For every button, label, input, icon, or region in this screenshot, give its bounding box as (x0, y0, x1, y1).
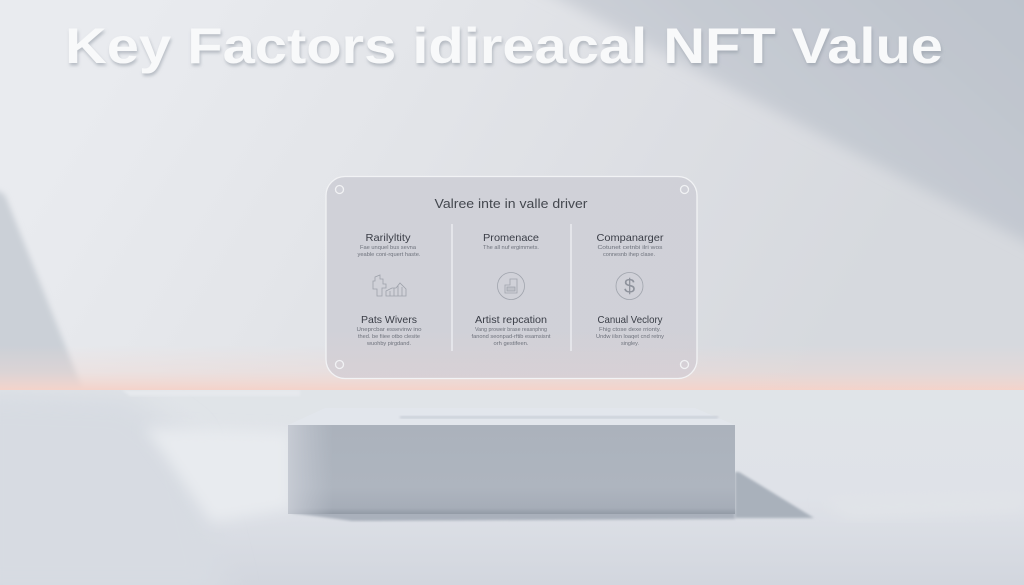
block: pats wivers: thed. be fiiee otbo clesite (358, 334, 420, 340)
panel: value drivers (326, 176, 697, 378)
block: pats wivers: Pats Wivers (361, 314, 417, 326)
block: canual veclory: Undw iilsn loaqet cnd retny (596, 334, 664, 340)
block: provenance: Promenace (483, 232, 539, 244)
block: artist reputation: Vang proweir brase reasnphng (475, 327, 547, 333)
title: Key Factors idireacal NFT Value (65, 18, 943, 74)
panel card (326, 176, 697, 378)
block: canual veclory: Canual Veclory (598, 314, 663, 326)
block: provenance (483, 232, 539, 251)
block: artist reputation: fanond seonpad-rftib esamsisnt (472, 334, 551, 340)
block: artist reputation (472, 314, 551, 347)
block: pats wivers: wuohby pirgdand. (366, 341, 411, 347)
icon: buildings (373, 275, 406, 296)
pedestal top (288, 408, 735, 425)
horizon glow strip (0, 345, 1024, 390)
block: canual veclory: singley. (621, 341, 639, 347)
block: companager: connesnb ihep clase. (603, 252, 655, 258)
pedestal (288, 408, 814, 521)
block: companager: Cotunet cetnbi ilri wos (598, 245, 663, 251)
block: canual veclory (596, 314, 664, 347)
block: canual veclory: Fhig ctose dexe rrionty. (599, 327, 662, 333)
pedestal front (288, 425, 735, 514)
block: artist reputation: orh gestifeen. (494, 341, 529, 347)
panel heading: Valree inte in valle driver (434, 196, 588, 211)
pedestal cast shadow (735, 472, 814, 518)
block: pats wivers: Uneprcbar essevinw ino (356, 327, 422, 333)
block: companager (596, 232, 664, 258)
block: rarity: yeable coni-rquert haste. (358, 252, 421, 258)
background wall (0, 0, 1024, 395)
block: companager: Companarger (596, 232, 664, 244)
icon: dollar in circle (616, 272, 643, 300)
corner rivets (336, 186, 688, 368)
icon: chart in circle (498, 272, 524, 300)
floor (0, 390, 1024, 585)
block: rarity: Rarilyltity (366, 232, 411, 244)
column dividers (452, 224, 571, 351)
block: pats wivers (356, 314, 422, 347)
block: rarity (358, 232, 421, 258)
block: rarity: Fae unquel bus sevna (360, 245, 417, 251)
icon: dollar in circle: $ (624, 276, 635, 298)
block: artist reputation: Artist repcation (475, 314, 547, 326)
block: provenance: The all nuf ergimmets. (483, 245, 539, 251)
